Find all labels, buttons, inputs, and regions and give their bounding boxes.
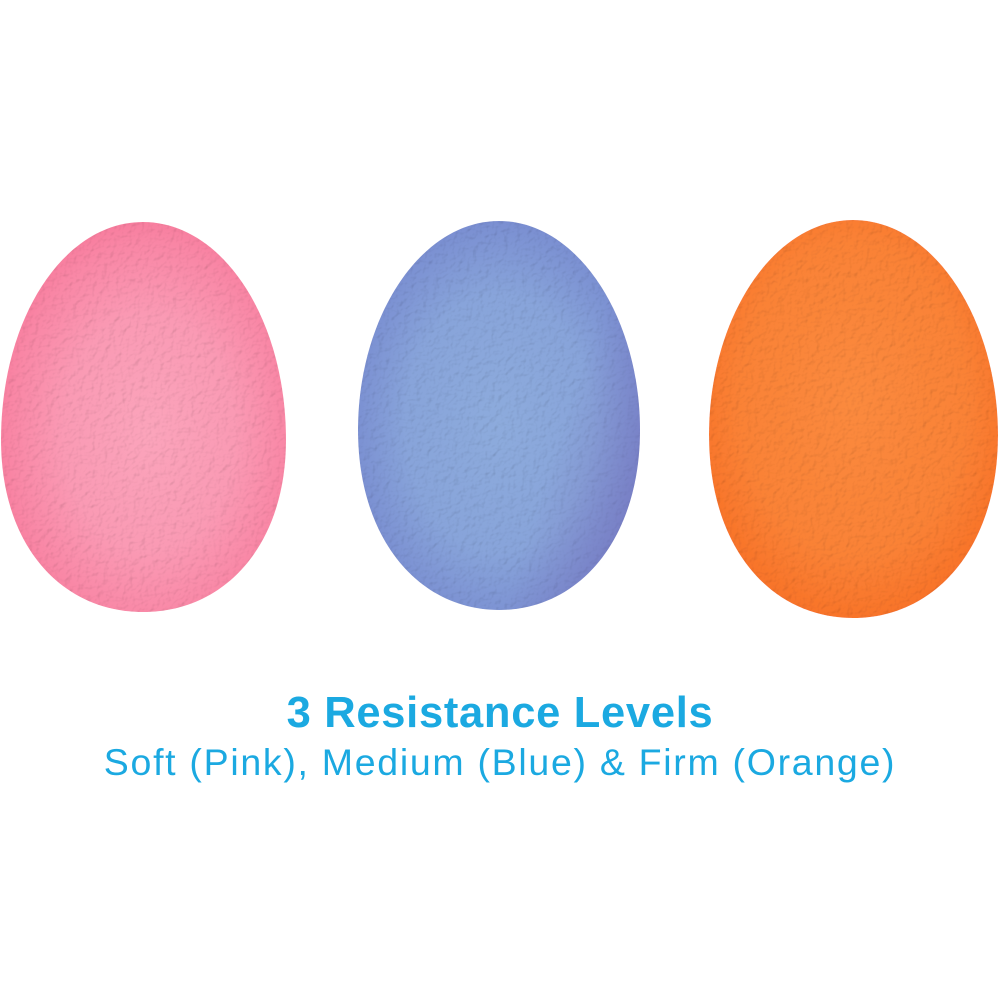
icon: orange firm egg [709,220,998,618]
icon: blue medium egg [358,221,640,610]
text: resistance descriptions: Soft (Pink), Medium (Blue) & Firm (Orange) [104,741,896,783]
icon: pink soft egg [1,222,286,612]
heading: resistance levels: 3 Resistance Levels [287,689,713,737]
